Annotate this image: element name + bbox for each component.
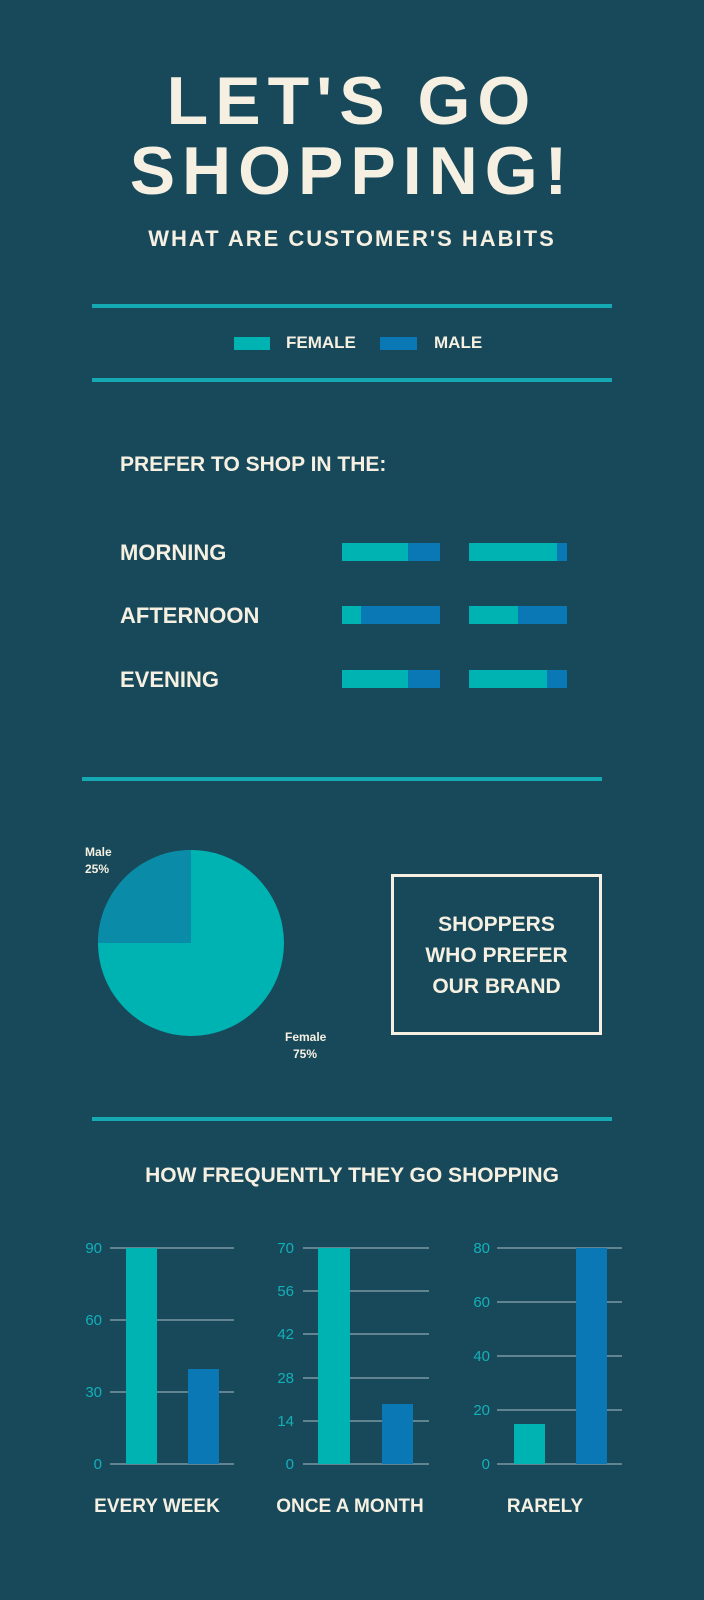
legend: FEMALE: [286, 333, 356, 352]
callout box: [391, 874, 602, 1035]
time-of-day bars: AFTERNOON: [120, 603, 259, 628]
subtitle: WHAT ARE CUSTOMER'S HABITS: [148, 226, 556, 251]
bar charts: 90: [85, 1240, 102, 1257]
bar charts: EVERY WEEK: [94, 1496, 220, 1517]
bar charts: 40: [473, 1348, 490, 1365]
bar charts: 56: [277, 1283, 294, 1300]
pie chart: [85, 845, 327, 1060]
bar charts: 14: [277, 1413, 294, 1430]
title: LET'S GO: [167, 63, 537, 139]
bar charts: 42: [277, 1326, 294, 1343]
bar charts: ONCE A MONTH: [276, 1496, 424, 1517]
heading: prefer to shop: PREFER TO SHOP IN THE:: [120, 453, 386, 476]
pie chart: 25%: [85, 862, 109, 876]
heading: frequency: HOW FREQUENTLY THEY GO SHOPPING: [145, 1164, 559, 1187]
title: [130, 63, 574, 209]
callout box: OUR BRAND: [432, 975, 561, 998]
bar charts: 60: [85, 1312, 102, 1329]
bar charts: 80: [473, 1240, 490, 1257]
bar charts: 0: [286, 1456, 294, 1473]
bar charts: 28: [277, 1370, 294, 1387]
bar charts: [85, 1240, 622, 1517]
bar charts: 0: [94, 1456, 102, 1473]
callout box: WHO PREFER: [425, 944, 568, 967]
bar charts: 70: [277, 1240, 294, 1257]
callout box: SHOPPERS: [438, 913, 555, 936]
bar charts: 30: [85, 1384, 102, 1401]
pie chart: Male: [85, 845, 112, 859]
pie chart: Female: [285, 1030, 327, 1044]
legend: [234, 333, 482, 352]
time-of-day bars: EVENING: [120, 667, 219, 692]
bar charts: 0: [482, 1456, 490, 1473]
legend: MALE: [434, 333, 482, 352]
bar charts: 60: [473, 1294, 490, 1311]
title: SHOPPING!: [130, 133, 574, 209]
bar charts: RARELY: [507, 1496, 584, 1517]
time-of-day bars: MORNING: [120, 540, 226, 565]
bar charts: 20: [473, 1402, 490, 1419]
time-of-day bars: [120, 540, 567, 692]
